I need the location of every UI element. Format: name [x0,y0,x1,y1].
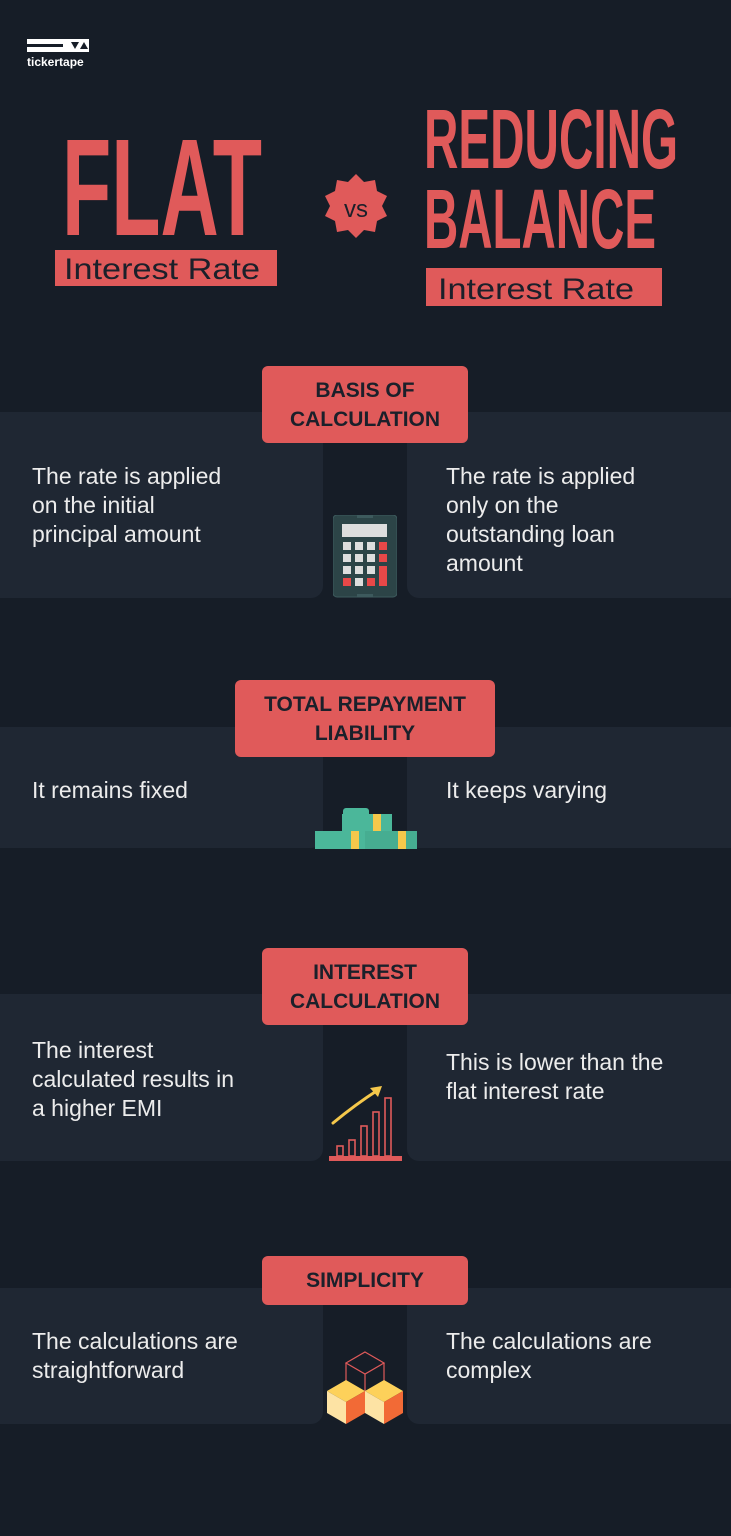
label: basis of calculation [262,366,468,443]
text: interest left [32,1037,234,1121]
panel: interest left [0,994,323,1161]
text: interest left: calculated results in [32,1066,234,1092]
panel: simplicity right [407,1288,731,1424]
label: basis of calculation: BASIS OF [315,378,415,402]
text: simplicity left: The calculations are [32,1328,238,1354]
label: total repayment liability: LIABILITY [315,722,415,744]
text: repayment right: It keeps varying [446,777,607,803]
text: simplicity left [32,1328,238,1383]
text: basis right: outstanding loan [446,521,615,547]
title: REDUCING BALANCE [424,92,678,266]
text: interest right: This is lower than the [446,1049,663,1075]
text: basis left: on the initial [32,492,155,518]
panel: repayment left [0,727,323,848]
text: interest left: a higher EMI [32,1095,162,1121]
badge: vs [325,174,387,238]
label: total repayment liability [235,680,495,757]
text: basis left: principal amount [32,521,201,547]
text: repayment left: It remains fixed [32,777,188,803]
logo: tickertape [27,39,89,69]
header title [55,92,678,306]
label: simplicity: SIMPLICITY [306,1269,424,1292]
icon: bar chart with arrow [329,1086,402,1161]
label: basis of calculation: CALCULATION [290,408,440,430]
badge: vs: vs [344,196,368,223]
subtitle box left: Interest Rate [64,253,260,286]
label: simplicity [262,1256,468,1305]
title: FLAT: FLAT [62,111,262,265]
subtitle box right [426,268,662,306]
label: interest calculation [262,948,468,1025]
panel: basis right [407,412,731,598]
text: interest right: flat interest rate [446,1078,605,1104]
panel: interest right [407,994,731,1161]
text: basis right: The rate is applied [446,463,635,489]
text: basis right [446,463,635,576]
text: simplicity right [446,1328,652,1383]
icon: money stack [315,808,417,849]
label: total repayment liability: TOTAL REPAYMENT [264,692,466,716]
panel: basis left [0,412,323,598]
text: basis right: amount [446,550,523,576]
label: interest calculation: INTEREST [313,960,417,984]
text: simplicity right: The calculations are [446,1328,652,1354]
icon: cubes [327,1351,403,1424]
text: basis right: only on the [446,492,559,518]
text: interest right [446,1049,663,1104]
subtitle box right: Interest Rate [438,273,634,306]
text: simplicity right: complex [446,1357,532,1383]
panel: repayment right [407,727,731,848]
text: basis left: The rate is applied [32,463,221,489]
icon: calculator [333,515,397,598]
text: interest left: The interest [32,1037,153,1063]
logo: tickertape: tickertape [27,55,84,69]
panel: simplicity left [0,1288,323,1424]
text: simplicity left: straightforward [32,1357,184,1383]
text: basis left [32,463,221,547]
label: interest calculation: CALCULATION [290,990,440,1012]
